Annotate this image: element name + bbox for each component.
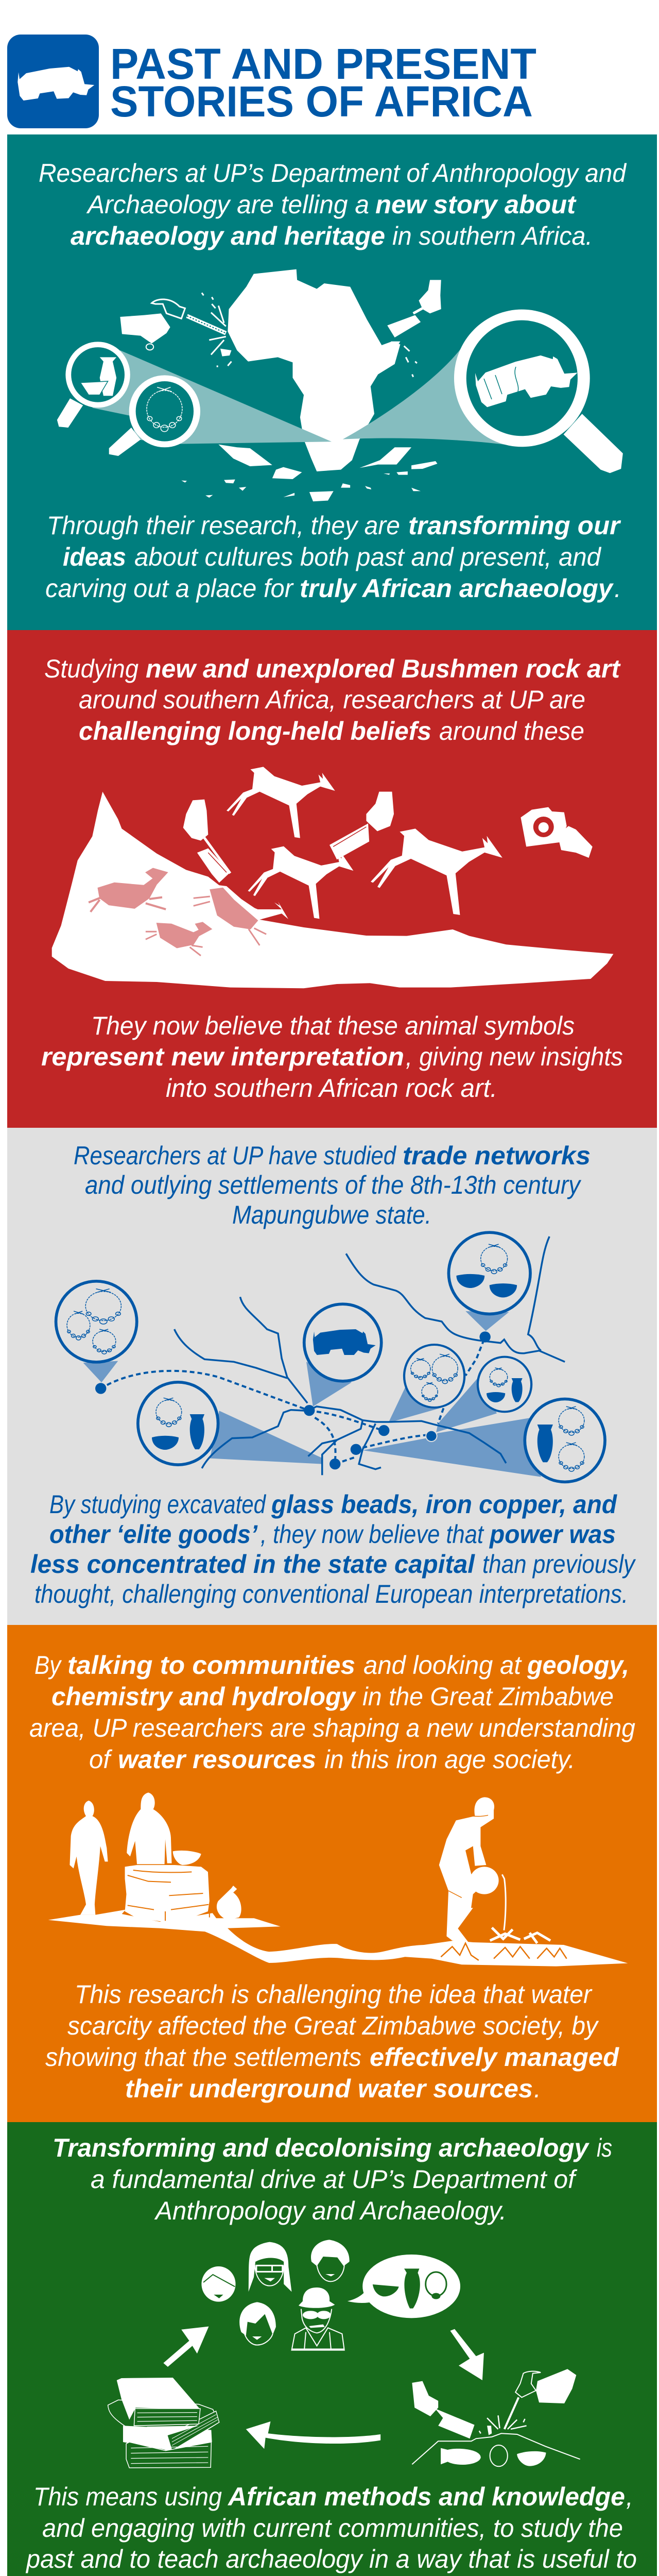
closing text: Through their research, they are	[47, 511, 400, 540]
intro text: area, UP researchers are shaping a new understanding	[29, 1714, 635, 1742]
illustration: trade network map	[55, 1231, 606, 1483]
icon: pot	[217, 1886, 241, 1920]
intro text: Anthropology and Archaeology.	[154, 2196, 507, 2225]
goods: bowls and vessels	[152, 1274, 553, 1462]
intro text: Researchers at UP have studied	[74, 1141, 397, 1170]
icon: hand and brush	[183, 800, 230, 883]
arrows	[163, 2327, 484, 2449]
panel: grey trade networks	[7, 1128, 657, 1625]
closing text: They now believe that these animal symbols	[91, 1011, 575, 1040]
intro text: new story about	[375, 190, 577, 219]
icon: bowl	[173, 1851, 201, 1865]
closing text: African methods and knowledge	[227, 2482, 625, 2511]
closing text	[25, 2482, 637, 2576]
icon: small magnifier, beads	[109, 375, 200, 456]
magnifier beams	[92, 348, 506, 445]
closing text: effectively managed	[370, 2043, 619, 2072]
intro text: in southern Africa.	[392, 222, 593, 250]
closing text	[45, 1980, 619, 2103]
closing text: and engaging with current communities, to study the	[42, 2514, 623, 2543]
closing text	[30, 1490, 636, 1608]
icon: excavation with tools	[412, 2369, 580, 2466]
icon: hand with brush	[387, 280, 441, 377]
closing text: .	[614, 574, 621, 603]
closing text: This research is challenging the idea that water	[75, 1980, 593, 2009]
trade routes	[107, 1340, 484, 1464]
icon: speech bubble with goods	[348, 2255, 460, 2318]
panel: red rock art	[7, 630, 657, 1128]
icon: rhino in large magnifier	[473, 349, 581, 409]
intro text: around southern Africa, researchers at UP are	[79, 685, 585, 714]
icon: second hand and brush	[330, 792, 394, 859]
antelope figures	[227, 767, 502, 919]
panel: orange water resources	[7, 1625, 657, 2122]
illustration: knowledge cycle	[108, 2240, 580, 2468]
closing text	[45, 511, 621, 603]
closing text: ,	[626, 2482, 633, 2511]
intro text: is	[597, 2133, 612, 2162]
icon: map fragments	[181, 349, 438, 501]
intro text: By	[34, 1651, 62, 1680]
intro text: geology,	[527, 1651, 629, 1680]
illustration: rock art	[52, 767, 613, 988]
closing text: This means using	[33, 2482, 222, 2511]
closing text	[41, 1011, 623, 1103]
title	[110, 40, 536, 126]
intro text	[74, 1141, 591, 1229]
panel: green decolonising archaeology	[7, 2122, 657, 2576]
intro text	[44, 654, 621, 745]
intro text	[39, 159, 627, 250]
intro text: chemistry and hydrology	[51, 1682, 356, 1711]
panel: teal introduction	[7, 134, 657, 630]
closing text: ideas	[63, 543, 126, 571]
intro text: archaeology and heritage	[71, 222, 385, 250]
closing text: represent new interpretation	[41, 1042, 404, 1071]
icon: plants	[441, 1928, 567, 1960]
icon: Africa map	[228, 269, 400, 471]
settlement dots	[95, 1331, 491, 1469]
icon: camera in hand	[521, 807, 593, 858]
intro text: in the Great Zimbabwe	[362, 1682, 614, 1711]
closing text: .	[534, 2074, 541, 2103]
beams	[83, 1311, 541, 1477]
closing text: about cultures both past and present, and	[134, 543, 602, 571]
closing text: glass beads, iron copper, and	[271, 1490, 617, 1519]
icon: small magnifier, pottery	[57, 342, 130, 428]
pink rock paintings	[89, 868, 266, 956]
icon: stack of books	[108, 2378, 219, 2468]
closing text: power was	[489, 1520, 616, 1549]
closing text: into southern African rock art.	[166, 1074, 497, 1103]
illustration: water management	[48, 1792, 628, 1967]
illustration: Africa map with magnifiers and tools	[57, 269, 623, 501]
figure: person pouring water	[439, 1797, 506, 1942]
closing text: , giving new insights	[406, 1042, 623, 1071]
closing text: transforming our	[408, 511, 621, 540]
intro text: talking to communities	[67, 1651, 355, 1680]
intro text	[53, 2133, 612, 2225]
icon: community faces	[201, 2240, 350, 2350]
intro text: of	[89, 1745, 113, 1774]
intro text: trade networks	[403, 1141, 591, 1170]
intro text: Archaeology are telling a	[86, 190, 369, 219]
stone well	[125, 1865, 210, 1922]
closing text: carving out a place for	[45, 574, 294, 603]
closing text: less concentrated in the state capital	[30, 1550, 475, 1579]
intro text: challenging long-held beliefs	[79, 717, 431, 745]
rivers	[175, 1236, 565, 1475]
title icon: rhino badge	[7, 35, 99, 128]
title: STORIES OF AFRICA	[110, 77, 533, 126]
intro text: and outlying settlements of the 8th-13th century	[85, 1171, 582, 1199]
rock face	[52, 792, 613, 988]
closing text: than previously	[482, 1550, 636, 1579]
figure: person behind well	[127, 1792, 171, 1864]
intro text: and looking at	[363, 1651, 522, 1680]
closing text: their underground water sources	[125, 2074, 533, 2103]
intro text: Studying	[44, 654, 138, 683]
intro text: new and unexplored Bushmen rock art	[146, 654, 621, 683]
intro text: water resources	[118, 1745, 316, 1774]
icon: large magnifier frame	[454, 310, 623, 473]
closing text: By studying excavated	[49, 1490, 267, 1519]
circles with goods	[55, 1231, 606, 1483]
icon: hand with hammer and chisel	[120, 293, 232, 367]
intro text	[29, 1651, 635, 1774]
ground and underground channel	[48, 1910, 628, 1967]
white antelope leg on rock edge	[230, 898, 288, 920]
closing text: truly African archaeology	[300, 574, 614, 603]
intro text: around these	[439, 717, 584, 745]
closing text: scarcity affected the Great Zimbabwe society, by	[67, 2011, 599, 2040]
closing text: past and to teach archaeology in a way that is useful to	[25, 2545, 637, 2573]
closing text: other ‘elite goods’	[49, 1520, 258, 1549]
intro text: Researchers at UP’s Department of Anthropology and	[39, 159, 627, 188]
intro text: Mapungubwe state.	[232, 1200, 431, 1229]
intro text: a fundamental drive at UP’s Department of	[91, 2165, 578, 2194]
closing text: showing that the settlements	[45, 2043, 361, 2072]
figure: standing person	[70, 1801, 108, 1915]
intro text: in this iron age society.	[324, 1745, 575, 1774]
closing text: , they now believe that	[261, 1520, 484, 1549]
title: PAST AND PRESENT	[110, 40, 536, 88]
goods: beads	[67, 1244, 584, 1471]
intro text: Transforming and decolonising archaeology	[53, 2133, 589, 2162]
